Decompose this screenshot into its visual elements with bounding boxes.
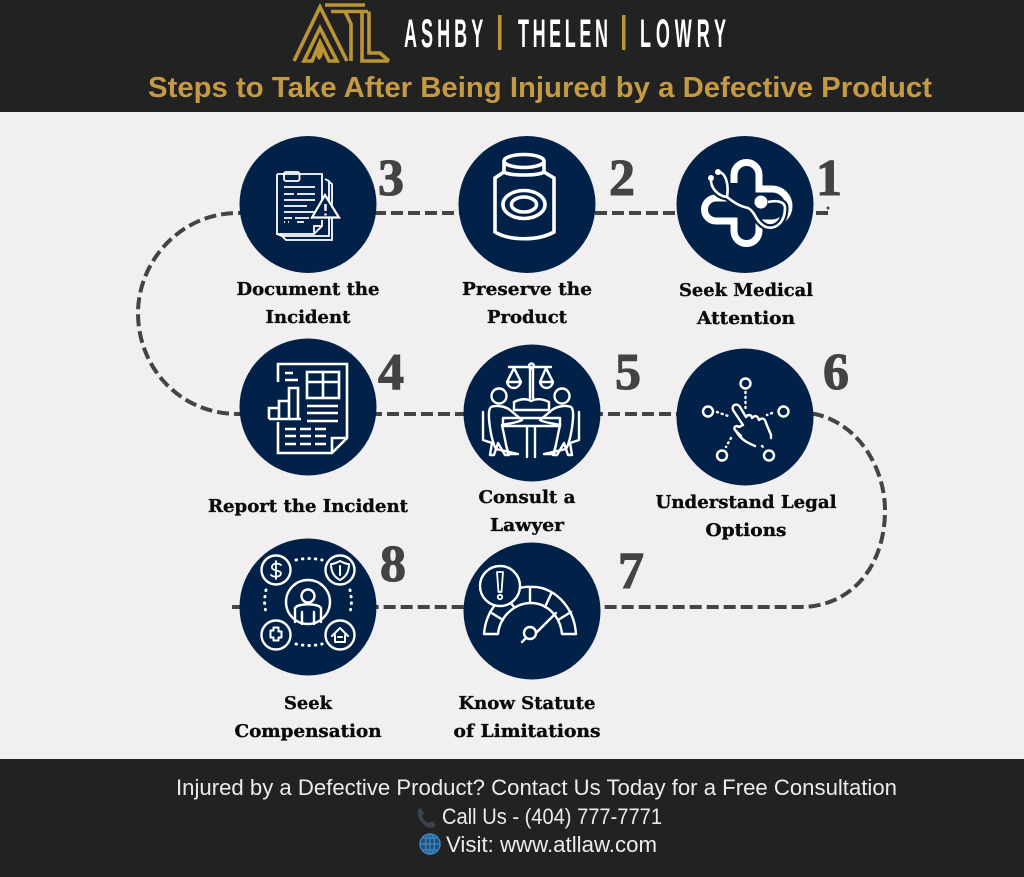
call to action: Injured by a Defective Product? Contact Us Today for a Free Consultation (176, 775, 897, 800)
step 8 (234, 536, 406, 742)
step 3 (236, 136, 404, 328)
step 1 (676, 136, 842, 329)
label: of Limitations (454, 721, 600, 742)
icon: lawyer consultation with scales (483, 364, 579, 457)
phone line: Call Us - (404) 777-7771 (442, 804, 662, 829)
step 4 (208, 338, 409, 517)
label (234, 693, 382, 742)
icon: documents with warning (277, 172, 339, 240)
number 8: 8 (380, 536, 406, 593)
label: Know Statute (458, 693, 596, 714)
label (236, 279, 380, 328)
label: Preserve the (462, 279, 592, 300)
label: Lawyer (490, 515, 565, 536)
dashed connecting path (138, 206, 885, 607)
label: Seek (284, 693, 333, 714)
firm name (404, 11, 726, 56)
icon: report page with charts (269, 364, 347, 453)
label: Attention (696, 308, 795, 329)
label: Compensation (234, 721, 382, 742)
number 1: 1 (816, 150, 842, 207)
label: Report the Incident (208, 496, 409, 517)
icon: gauge with alert (480, 566, 576, 642)
label: Incident (266, 307, 351, 328)
title: Steps to Take After Being Injured by a Defective Product (148, 72, 932, 104)
label (478, 487, 576, 536)
step 2 (458, 136, 635, 328)
logo: ATL monogram (294, 5, 389, 61)
icon: medical cross with stethoscope (704, 162, 789, 244)
icon: hand pointing to options (703, 378, 788, 460)
label: Options (706, 520, 786, 541)
icon: product jar (495, 154, 554, 239)
label (656, 492, 837, 541)
number 2: 2 (609, 150, 635, 207)
label (679, 280, 813, 329)
firm name: LOWRY (640, 11, 726, 56)
header band (0, 0, 1024, 112)
label: Consult a (478, 487, 576, 508)
label: Document the (236, 279, 380, 300)
label (462, 279, 592, 328)
footer band (0, 759, 1024, 877)
label (454, 693, 600, 742)
website line: Visit: www.atllaw.com (446, 832, 657, 857)
step 6 (656, 344, 849, 541)
label: Understand Legal (656, 492, 837, 513)
firm name: ASHBY (404, 11, 483, 56)
number 7: 7 (618, 543, 644, 600)
step 5 (464, 344, 641, 536)
icon: compensation ring with person (262, 556, 354, 650)
number 5: 5 (615, 344, 641, 401)
number 4: 4 (378, 344, 404, 401)
label: Seek Medical (679, 280, 813, 301)
label: Product (487, 307, 568, 328)
number 6: 6 (823, 344, 849, 401)
number 3: 3 (378, 150, 404, 207)
firm name: THELEN (518, 11, 608, 56)
step 7 (454, 542, 644, 742)
